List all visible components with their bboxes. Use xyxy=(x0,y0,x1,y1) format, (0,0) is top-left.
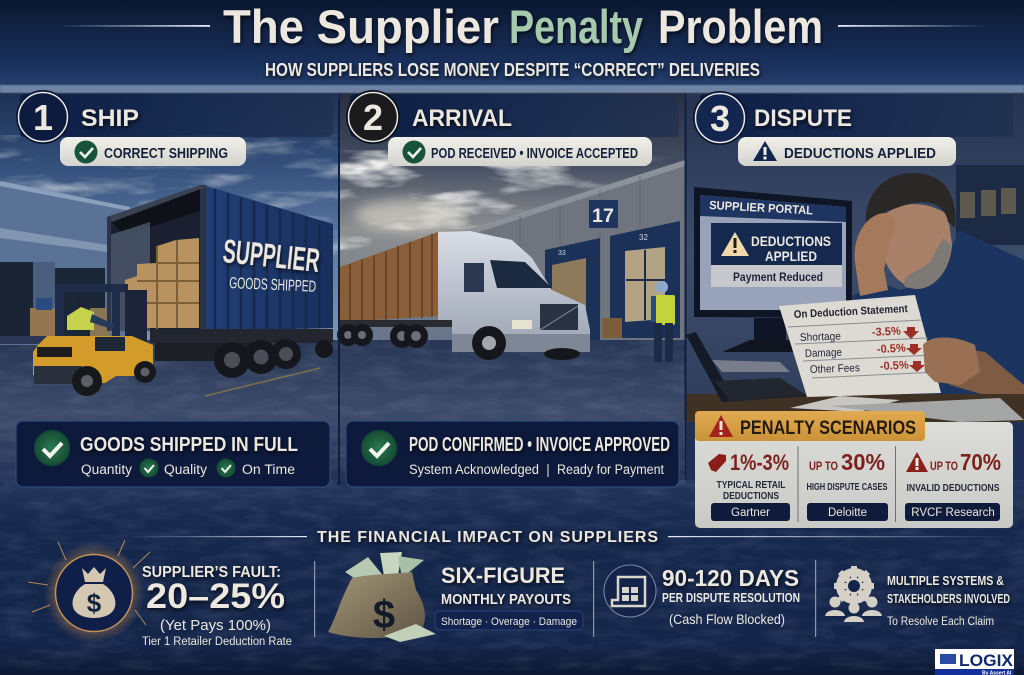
stat block: six-figure monthly payouts xyxy=(328,552,583,642)
icon: money bag badge: $ xyxy=(87,588,102,618)
warehouse with dock doors: 17 xyxy=(592,206,614,227)
stat: invalid deductions: INVALID DEDUCTIONS xyxy=(906,483,1000,494)
status pill: correct shipping: CORRECT SHIPPING xyxy=(104,146,228,162)
stat block: supplier's fault: Tier 1 Retailer Deduction Rate xyxy=(142,636,292,648)
computer monitor: supplier portal: DEDUCTIONS xyxy=(751,233,831,249)
card: POD confirmed invoice approved: System Acknowledged xyxy=(409,462,539,477)
step 2 header xyxy=(346,90,679,166)
step number 2 xyxy=(346,90,400,144)
step 1 header xyxy=(16,90,333,166)
warehouse building xyxy=(0,181,130,345)
stat block: multiple systems and stakeholders xyxy=(825,566,1010,628)
container side labelled SUPPLIER: GOODS SHIPPED xyxy=(229,275,316,296)
stat block: supplier's fault xyxy=(28,540,292,648)
stat block: multiple systems and stakeholders: MULTIPLE SYSTEMS & xyxy=(887,574,1004,588)
logo: Logix by Assert AI: LOGIX xyxy=(959,651,1014,670)
deduction statement paper: -0.5% xyxy=(880,359,909,373)
stat: typical retail deductions xyxy=(708,450,790,521)
status pill: correct shipping xyxy=(60,137,246,166)
status pill: deductions applied xyxy=(738,137,956,166)
person with hand on head xyxy=(852,173,1024,404)
step number 2: 2 xyxy=(363,97,383,138)
status pill: POD received: POD RECEIVED • INVOICE ACCEPTED xyxy=(431,146,638,162)
card: POD confirmed invoice approved: POD CONFIRMED • INVOICE APPROVED xyxy=(409,434,670,456)
status pill: POD received xyxy=(388,137,652,166)
stat: typical retail deductions: 1%-3% xyxy=(730,450,789,475)
stat block: multiple systems and stakeholders: To Resolve Each Claim xyxy=(887,616,994,628)
card: goods shipped in full: Quality xyxy=(164,462,207,477)
title xyxy=(223,0,823,53)
dock worker in hi-vis vest xyxy=(651,281,675,362)
stat block: supplier's fault: 20–25% xyxy=(146,577,285,616)
step number 1: 1 xyxy=(33,97,53,138)
lower background texture xyxy=(0,480,1024,670)
deduction statement paper: -3.5% xyxy=(872,325,901,339)
card: goods shipped in full: On Time xyxy=(242,462,295,477)
card: POD confirmed invoice approved xyxy=(346,421,679,487)
card: POD confirmed invoice approved: Ready for Payment xyxy=(557,462,664,477)
lower background for step 3 column xyxy=(686,422,1024,484)
stat: high dispute cases xyxy=(806,449,888,521)
card: goods shipped in full xyxy=(16,421,330,487)
subtitle: HOW SUPPLIERS LOSE MONEY DESPITE “CORRECT” DELIVERIES xyxy=(265,60,760,80)
computer monitor: supplier portal: SUPPLIER PORTAL xyxy=(709,198,813,217)
computer monitor: supplier portal: Payment Reduced xyxy=(733,270,823,284)
step 3 header: DISPUTE xyxy=(754,105,852,132)
chip: shortage overage damage: Shortage · Overage · Damage xyxy=(441,616,577,628)
warehouse with dock doors: 33 xyxy=(558,250,566,257)
deduction statement paper: On Deduction Statement xyxy=(794,303,908,321)
container side labelled SUPPLIER: SUPPLIER xyxy=(221,232,322,279)
status pill: deductions applied: DEDUCTIONS APPLIED xyxy=(784,146,936,162)
title: Penalty xyxy=(509,0,643,53)
container side labelled SUPPLIER xyxy=(107,185,333,331)
deduction statement paper: Other Fees xyxy=(810,362,861,376)
stat: invalid deductions: 70% xyxy=(960,449,1001,475)
icon: sack of cash: $ xyxy=(373,593,395,637)
trailer chassis and wheels xyxy=(150,329,333,396)
stat: high dispute cases: 30% xyxy=(841,449,885,475)
title: Problem xyxy=(658,0,823,53)
warehouse racks xyxy=(956,165,1024,245)
stat: invalid deductions: UP TO xyxy=(930,459,958,473)
stat block: supplier's fault: SUPPLIER’S FAULT: xyxy=(142,564,281,581)
penalty heading tab xyxy=(695,411,925,441)
shipping container on truck xyxy=(337,232,465,348)
computer monitor: supplier portal xyxy=(694,187,852,352)
page background: lower band xyxy=(0,480,1024,675)
stat: invalid deductions: RVCF Research xyxy=(911,507,995,519)
stat: invalid deductions xyxy=(905,449,1001,521)
icon: gear and people xyxy=(825,566,882,622)
stat: typical retail deductions: TYPICAL RETAIL xyxy=(716,480,786,491)
scene: step 3 supplier reviewing deductions xyxy=(686,92,1024,424)
step number 3 xyxy=(693,91,747,145)
icon: sack of cash xyxy=(328,552,436,642)
white truck cab xyxy=(438,231,590,360)
computer monitor: supplier portal: APPLIED xyxy=(765,248,817,264)
step number 3: 3 xyxy=(710,98,730,139)
stat block: dispute resolution days: PER DISPUTE RESOLUTION xyxy=(662,590,800,605)
deduction statement paper: Shortage xyxy=(800,331,841,344)
icon: money bag badge xyxy=(28,540,150,643)
hand gripping paper xyxy=(923,338,980,385)
panel: penalty scenarios xyxy=(695,411,1013,528)
step 3 header xyxy=(693,91,1013,166)
logo: Logix by Assert AI xyxy=(935,649,1014,675)
section heading: financial impact: THE FINANCIAL IMPACT ON SUPPLIERS xyxy=(317,529,658,546)
step 1 header: SHIP xyxy=(81,105,139,132)
stat block: six-figure monthly payouts: SIX-FIGURE xyxy=(441,563,565,588)
forklift xyxy=(33,284,156,396)
stat: typical retail deductions: DEDUCTIONS xyxy=(723,491,779,502)
title accent lines xyxy=(55,25,988,27)
stat: high dispute cases: HIGH DISPUTE CASES xyxy=(806,482,888,493)
penalty heading tab: PENALTY SCENARIOS xyxy=(740,418,916,439)
title: The Supplier xyxy=(223,0,499,53)
deduction statement paper: -0.5% xyxy=(877,342,906,356)
warehouse with dock doors xyxy=(460,160,685,340)
stat: typical retail deductions: Gartner xyxy=(731,507,770,519)
page background: top band xyxy=(0,0,1024,92)
chip: shortage overage damage xyxy=(435,611,583,630)
deduction statement paper: Damage xyxy=(805,347,842,360)
container open end with boxes xyxy=(107,185,203,331)
deduction statement paper xyxy=(779,295,941,397)
step 2 header: ARRIVAL xyxy=(412,105,512,132)
stat block: dispute resolution days: 90-120 DAYS xyxy=(662,565,799,591)
warehouse with dock doors: 32 xyxy=(639,233,648,242)
card: goods shipped in full: Quantity xyxy=(81,462,132,477)
icon: calendar grid xyxy=(604,565,656,617)
stat: high dispute cases: Deloitte xyxy=(828,507,867,519)
scene: step 1 yard and forklift loading container xyxy=(0,92,339,485)
step number 1 xyxy=(16,90,70,144)
panel dividers xyxy=(338,100,686,485)
stat block: dispute resolution days: (Cash Flow Blocked) xyxy=(669,611,785,627)
stat block: supplier's fault: (Yet Pays 100%) xyxy=(160,617,271,634)
stat: high dispute cases: UP TO xyxy=(809,459,838,473)
misty band under title xyxy=(0,85,1024,93)
laptop xyxy=(686,332,808,402)
stat block: six-figure monthly payouts: MONTHLY PAYOUTS xyxy=(441,591,571,608)
card: goods shipped in full: GOODS SHIPPED IN FULL xyxy=(80,434,298,456)
scene: step 2 truck at dock xyxy=(337,92,685,485)
stat block: dispute resolution days xyxy=(604,565,800,627)
desk and papers xyxy=(686,394,1024,424)
